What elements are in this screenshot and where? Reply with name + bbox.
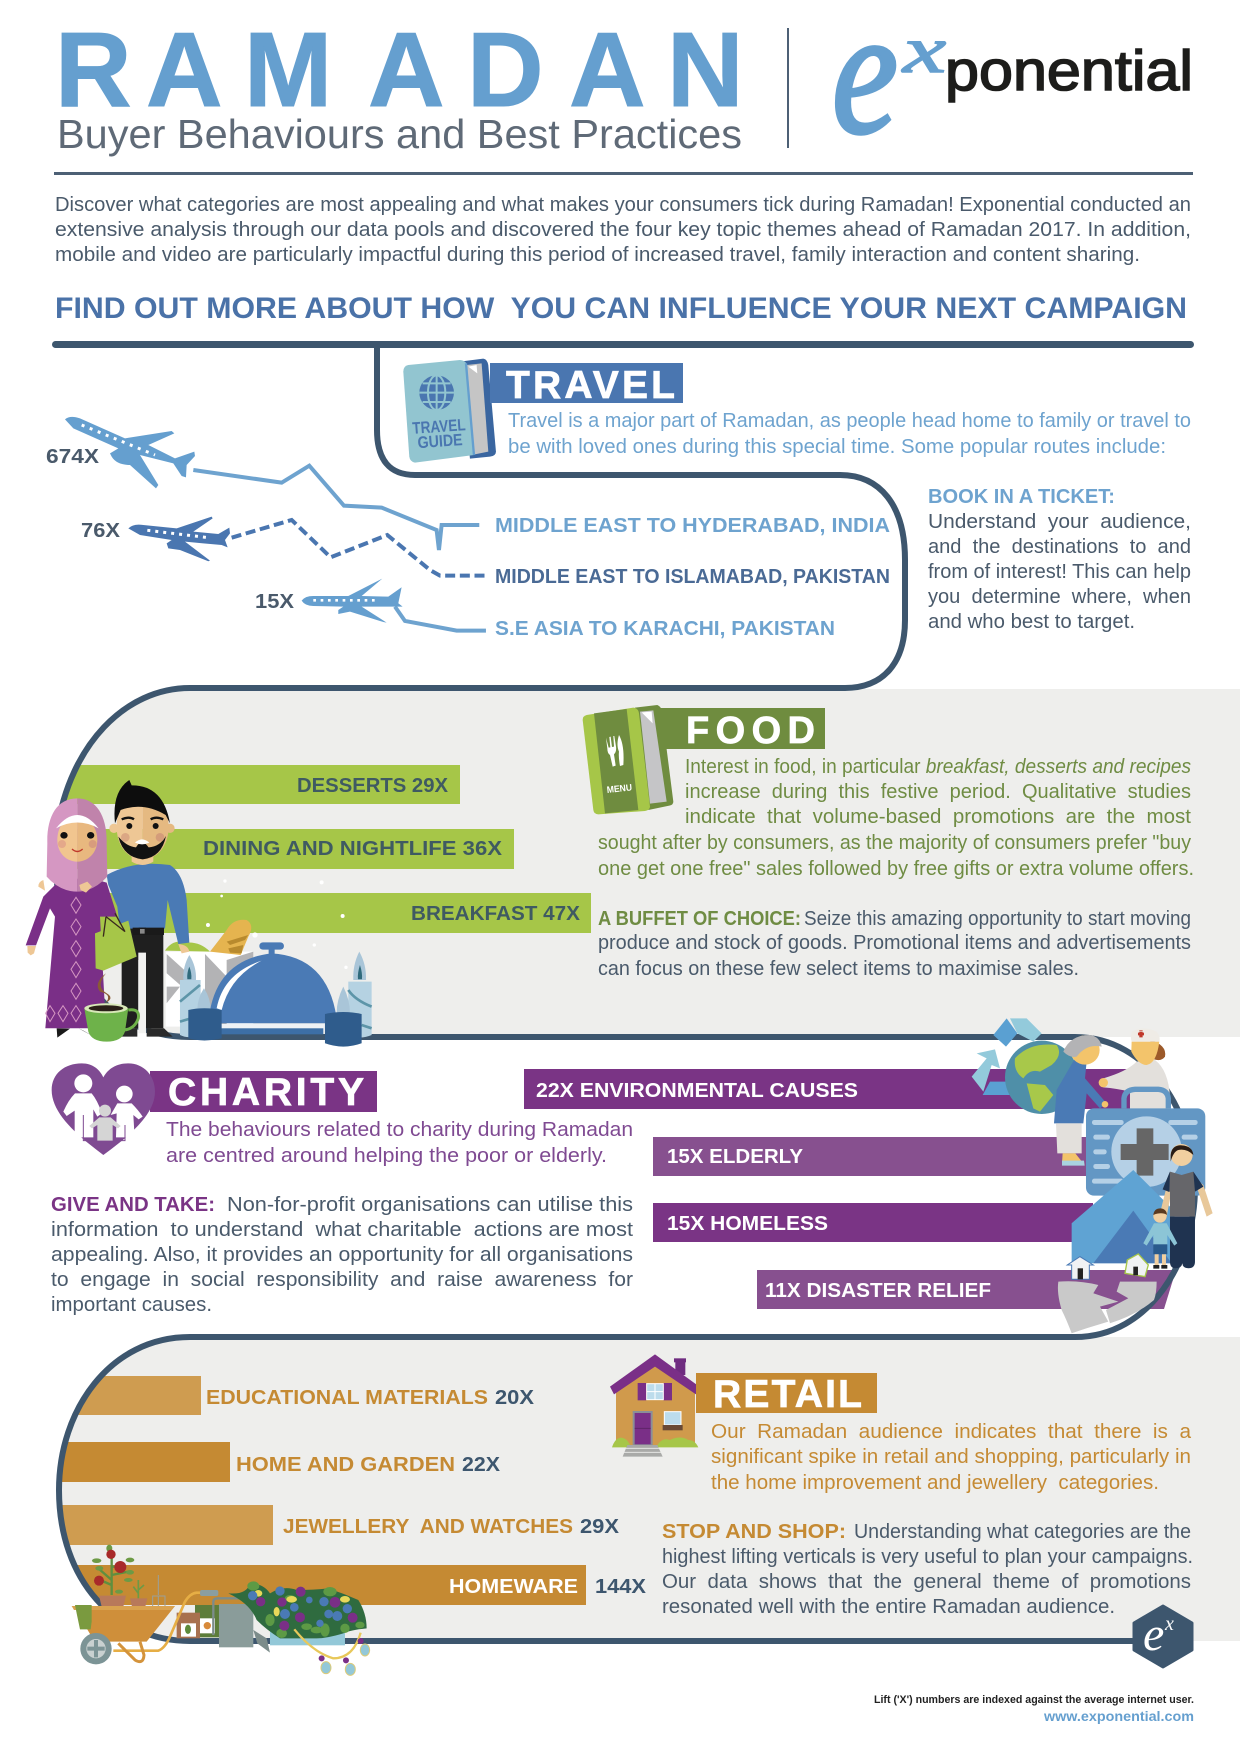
bar labels: food: DINING AND NIGHTLIFE 36X	[203, 837, 502, 860]
bar labels: retail: 29X	[580, 1515, 619, 1538]
icon: man and child	[1143, 1144, 1213, 1269]
food intro text: one get one free" sales followed by free gifts or extra volume offers.	[598, 858, 1194, 880]
route labels: MIDDLE EAST TO ISLAMABAD, PAKISTAN	[495, 565, 890, 588]
bar chart: food bars	[40, 765, 591, 933]
route labels: S.E ASIA TO KARACHI, PAKISTAN	[495, 617, 835, 640]
charity intro text: are centred around helping the poor or elderly.	[166, 1145, 607, 1167]
tip: book in a ticket: Understand your audience,	[928, 511, 1191, 533]
bar labels: food	[203, 774, 580, 925]
icon: house	[610, 1354, 699, 1457]
bar labels: retail: 144X	[595, 1575, 646, 1598]
retail intro text	[711, 1421, 1192, 1494]
icon: coffee cup	[84, 973, 139, 1042]
tip: a buffet of choice: can focus on these few select items to maximise sales.	[598, 958, 1079, 980]
tip: stop and shop: resonated well with the entire Ramadan audience.	[662, 1596, 1115, 1618]
bar labels: retail: EDUCATIONAL MATERIALS	[206, 1386, 488, 1409]
connecting ribbon line	[56, 346, 1195, 1641]
bar labels: food: BREAKFAST 47X	[411, 902, 580, 925]
tip: give and take: information to understand what charitable actions are most	[51, 1219, 633, 1241]
tip: a buffet of choice: Seize this amazing opportunity to start moving	[804, 908, 1191, 930]
illustration: garden wheelbarrow	[72, 1545, 370, 1675]
subtitle: Buyer Behaviours and Best Practices	[57, 111, 742, 157]
bar labels: food: DESSERTS 29X	[297, 774, 448, 797]
tip: a buffet of choice: A BUFFET OF CHOICE:	[598, 908, 801, 930]
bar labels: retail: 22X	[462, 1453, 500, 1476]
footer url: www.exponential.com	[1043, 1709, 1194, 1724]
panel background: food	[56, 689, 1240, 1037]
arrow: route to Islamabad	[232, 520, 487, 576]
bar labels: charity: 15X HOMELESS	[667, 1212, 828, 1235]
travel intro text: Travel is a major part of Ramadan, as people head home to family or travel to	[508, 410, 1191, 432]
arrow: route to Hyderabad	[193, 466, 479, 550]
bar chart: retail bars	[40, 1376, 586, 1605]
title: RAMADAN	[55, 11, 744, 129]
panel background: retail	[59, 1337, 1240, 1641]
illustration: charitable causes	[972, 1018, 1213, 1333]
icon: candles	[180, 952, 372, 1047]
icon: cracked earth and houses	[1058, 1254, 1157, 1333]
icon: travel guide book: GUIDE	[417, 430, 463, 452]
bar labels: charity: 22X ENVIRONMENTAL CAUSES	[536, 1079, 858, 1102]
heading: travel: TRAVEL	[506, 364, 675, 407]
icon: tent	[1072, 1170, 1195, 1263]
icon: shopping bag	[95, 913, 137, 971]
tip: book in a ticket: from of interest! This can help	[928, 561, 1191, 583]
icon: globe	[1005, 1041, 1078, 1114]
tip: stop and shop: Understanding what categories are the	[854, 1521, 1191, 1543]
travel intro text: be with loved ones during this special time. Some popular routes include:	[508, 436, 1166, 458]
panel: charity	[51, 1018, 1213, 1333]
lift values: 674X	[46, 446, 100, 468]
charity intro text: The behaviours related to charity during Ramadan	[166, 1119, 633, 1141]
tip: give and take: important causes.	[51, 1294, 212, 1316]
food intro text	[598, 756, 1194, 880]
tip: a buffet of choice	[598, 908, 1191, 980]
tip: give and take	[51, 1194, 633, 1316]
tip: stop and shop: STOP AND SHOP:	[662, 1521, 846, 1543]
logo: exponential: x	[902, 14, 946, 87]
bar labels: retail: JEWELLERY AND WATCHES	[283, 1515, 573, 1538]
food intro text: sought after by consumers, as the majority of consumers prefer "buy	[598, 832, 1191, 854]
intro text: Discover what categories are most appealing and what makes your consumers tick during Ramadan! Exponential conducted an	[55, 194, 1191, 216]
route labels: MIDDLE EAST TO HYDERABAD, INDIA	[495, 514, 890, 537]
logo: exponential: ponential	[945, 39, 1193, 103]
icon: nurse	[1099, 1028, 1171, 1110]
tip: stop and shop	[662, 1521, 1193, 1618]
icon: travel guide book	[403, 359, 496, 463]
call to action heading: FIND OUT MORE ABOUT HOW YOU CAN INFLUENCE YOUR NEXT CAMPAIGN	[55, 292, 1187, 325]
bar labels: charity: 15X ELDERLY	[667, 1145, 803, 1168]
lift values: 15X	[255, 591, 295, 613]
tip: give and take: GIVE AND TAKE:	[51, 1194, 215, 1216]
retail intro text: significant spike in retail and shopping, particularly in	[711, 1446, 1191, 1468]
tip: give and take: to engage in social responsibility and raise awareness for	[51, 1269, 633, 1291]
intro text	[55, 194, 1191, 266]
icon: garland	[294, 1629, 370, 1675]
header	[55, 0, 1193, 171]
tip: book in a ticket	[928, 486, 1191, 633]
icon: plane 76X	[128, 517, 230, 561]
route labels	[495, 514, 890, 640]
tip: book in a ticket: you determine where, when	[928, 586, 1191, 608]
illustration: couple with food	[26, 780, 372, 1047]
icon: boxes	[177, 1605, 220, 1638]
tip: book in a ticket: and the destinations to and	[928, 536, 1191, 558]
tip: give and take: Non-for-profit organisations can utilise this	[227, 1194, 633, 1216]
icon: hexagon logo: e	[1143, 1608, 1164, 1661]
panel: travel	[46, 359, 1191, 640]
retail intro text: the home improvement and jewellery categories.	[711, 1472, 1159, 1494]
bar labels: retail	[206, 1386, 646, 1598]
icon: recycling	[972, 1018, 1042, 1095]
bar chart: charity bars	[524, 1069, 1176, 1309]
icon: plane 674X	[65, 417, 195, 488]
icon: family heart	[52, 1063, 155, 1155]
icon: man	[107, 780, 189, 1037]
charity intro text	[166, 1119, 633, 1167]
icon: first aid kit	[1086, 1089, 1205, 1196]
divider: top bar	[52, 341, 1194, 348]
icon: hexagon logo: x	[1164, 1613, 1174, 1635]
panel: retail	[72, 1354, 1193, 1675]
heading: retail: RETAIL	[713, 1373, 862, 1416]
retail intro text: Our Ramadan audience indicates that there is a	[711, 1421, 1192, 1443]
footer note: Lift ('X') numbers are indexed against the average internet user.	[874, 1694, 1194, 1706]
intro text: extensive analysis through our data pools and discovered the four key topic themes ahead of Ramadan 2017. In addition,	[55, 219, 1191, 241]
icon: plane 15X	[302, 579, 403, 623]
tip: book in a ticket: BOOK IN A TICKET:	[928, 486, 1115, 508]
tip: give and take: appealing. Also, it provides an opportunity for all organisations	[51, 1244, 633, 1266]
icon: food box	[165, 920, 253, 1027]
tip: stop and shop: highest lifting verticals is very useful to plan your campaigns.	[662, 1546, 1193, 1568]
icon: travel guide book: TRAVEL	[412, 415, 466, 438]
bar labels: retail: HOME AND GARDEN	[236, 1453, 455, 1476]
icon: woman	[26, 798, 117, 1038]
icon: menu book: MENU	[606, 782, 633, 795]
arrow: route to Karachi	[395, 607, 486, 631]
heading: charity: CHARITY	[168, 1071, 364, 1114]
heading: food: FOOD	[686, 710, 815, 752]
bar labels: retail: 20X	[495, 1386, 534, 1409]
icon: wheelbarrow	[72, 1590, 218, 1662]
tip: stop and shop: Our data shows that the general theme of promotions	[662, 1571, 1191, 1593]
sparkles	[206, 879, 348, 969]
icon: watering can	[213, 1598, 270, 1653]
icon: menu book	[583, 705, 673, 814]
bar labels: charity	[536, 1079, 991, 1302]
travel intro text	[508, 410, 1191, 458]
tip: a buffet of choice: produce and stock of goods. Promotional items and advertisements	[598, 932, 1191, 954]
lift values	[46, 446, 295, 613]
logo: exponential	[832, 0, 1193, 171]
tip: book in a ticket: and who best to target.	[928, 611, 1135, 633]
icon: flower box	[228, 1581, 367, 1645]
intro text: mobile and video are particularly impactful during this period of increased travel, family interaction and content sharing.	[55, 244, 1140, 266]
lift values: 76X	[81, 520, 121, 542]
panel: food	[26, 705, 1194, 1047]
food intro text: Interest in food, in particular breakfast, desserts and recipes	[685, 756, 1191, 778]
icon: plants	[92, 1545, 165, 1607]
icon: cloche dish	[208, 942, 337, 1034]
bar labels: retail: HOMEWARE	[449, 1575, 578, 1598]
route chart: planes and routes	[65, 417, 487, 631]
bar labels: charity: 11X DISASTER RELIEF	[765, 1279, 991, 1302]
food intro text: indicate that volume-based promotions are the most	[685, 806, 1191, 828]
icon: elderly woman	[1054, 1035, 1108, 1166]
icon: hexagon logo	[1134, 1606, 1192, 1667]
food intro text: increase during this festive period. Qualitative studies	[685, 781, 1191, 803]
